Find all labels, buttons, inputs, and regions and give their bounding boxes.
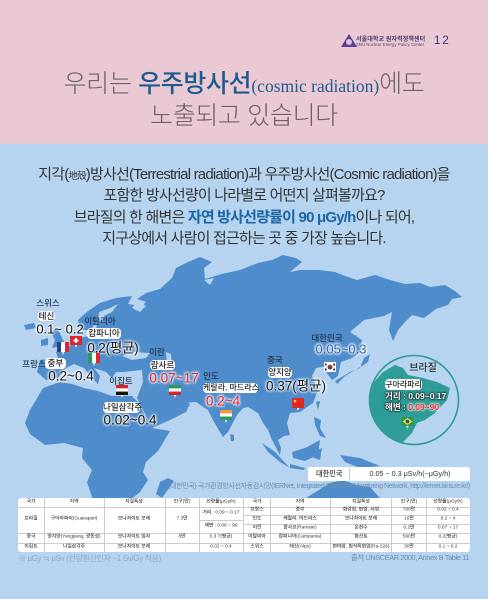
Italy label group: 0.2(평균) bbox=[87, 340, 139, 355]
title: 노출되고 있습니다 bbox=[150, 102, 338, 130]
Egypt label group bbox=[101, 376, 158, 428]
data table: 스위스 bbox=[250, 545, 264, 550]
data table: 모나자이트 모래 bbox=[118, 517, 150, 522]
data table: 지역 bbox=[70, 500, 78, 505]
data table: 0.1 ~ 0.2 bbox=[439, 545, 457, 550]
Italy label group bbox=[84, 316, 140, 358]
Iran label group: 이란 bbox=[149, 347, 165, 357]
text block: introduction: 지각(地殼)방사선(Terrestrial radiation)과 우주방사선(Cosmic radiation)을 bbox=[38, 166, 450, 183]
data table: 프랑스 bbox=[250, 508, 264, 513]
text block: introduction: 지구상에서 사람이 접근하는 곳 중 가장 높습니다. bbox=[102, 230, 386, 247]
France label group: 프랑스 bbox=[22, 359, 46, 369]
data table: 0.07 ~ 17 bbox=[438, 526, 458, 531]
data table: 30만 bbox=[404, 545, 414, 550]
Switzerland label group: 스위스 bbox=[36, 298, 60, 308]
data table: 7.3만 bbox=[176, 517, 188, 522]
France label group bbox=[22, 358, 96, 384]
text block: introduction: 브라질의 한 해변은 자연 방사선량률이 90 μGy/h이나 되어, bbox=[74, 209, 414, 226]
data table: 구아라파리(Guarapari) bbox=[51, 517, 97, 522]
data table: 모나자이트 모래 bbox=[345, 517, 377, 522]
flag: China bbox=[292, 398, 304, 411]
data table: 모나자이트 모래 bbox=[118, 545, 150, 550]
data table: 나일삼각주 bbox=[63, 545, 85, 550]
data table: 700만 bbox=[403, 508, 415, 513]
center name bbox=[356, 36, 425, 47]
France label group: 0.2~0.4 bbox=[48, 368, 94, 383]
data table: 0.02 ~ 0.4 bbox=[437, 508, 459, 513]
data table: 이탈리아 bbox=[248, 535, 266, 540]
center name: SNU Nuclear Energy Policy Center bbox=[356, 42, 424, 47]
panel: pink header bbox=[0, 0, 488, 144]
flag: France bbox=[57, 342, 69, 355]
China label group bbox=[264, 355, 328, 396]
China label group: 0.37(평균) bbox=[266, 378, 326, 393]
data table: 지역 bbox=[296, 500, 304, 505]
Egypt label group: 0.02~0.4 bbox=[104, 412, 156, 427]
data table: 거리 : 0.09 ~ 0.17 bbox=[203, 511, 239, 516]
flag: India bbox=[220, 410, 232, 423]
data table: 0.2(평균) bbox=[439, 535, 457, 540]
Italy label group: 이탈리아 bbox=[84, 316, 116, 326]
legend: Korea range: 대한민국 bbox=[316, 469, 342, 478]
data table: 0.2만 bbox=[403, 526, 415, 531]
Korea label group bbox=[311, 333, 368, 356]
India label group: 인도 bbox=[203, 371, 219, 381]
data table: 캄파니아(Campania) bbox=[279, 535, 321, 540]
data table: 인구(만) bbox=[174, 500, 190, 505]
flag: Egypt bbox=[116, 385, 128, 398]
data table: 국가 bbox=[253, 500, 261, 505]
world map bbox=[24, 255, 462, 498]
data table: 지질특성 bbox=[352, 500, 370, 505]
data table: 이란 bbox=[253, 526, 261, 531]
data table: 국가 bbox=[27, 500, 35, 505]
data table: 10만 bbox=[404, 517, 414, 522]
icon: center logo bbox=[341, 34, 357, 47]
Brazil labels: 브라질 bbox=[409, 363, 437, 374]
data table: 람사르(Ramsar) bbox=[283, 526, 317, 531]
China label group: 중국 bbox=[267, 355, 283, 365]
Brazil labels: 거리 : 0.09~0.17 bbox=[385, 391, 446, 401]
flag: Iran bbox=[169, 385, 181, 398]
panel: Brazil inset bbox=[368, 354, 460, 446]
data table: 이집트 bbox=[24, 545, 38, 550]
flag: Italy bbox=[88, 353, 100, 366]
data table: 선량률(μGy/h) bbox=[206, 500, 236, 505]
data table: 8만 bbox=[178, 535, 186, 540]
Italy label group: 캄파니아 bbox=[88, 328, 120, 338]
data table: 인구(만) bbox=[401, 500, 417, 505]
page number: 12 bbox=[434, 35, 451, 47]
Iran label group bbox=[147, 347, 200, 386]
Brazil labels: 해변 : 0.09~90 bbox=[385, 402, 439, 412]
data table: 케랄라, 마드라스 bbox=[283, 517, 317, 522]
data table: 0.02 ~ 0.4 bbox=[210, 545, 232, 550]
data table: 양지양(Yangjiang, 광동성) bbox=[47, 535, 101, 540]
data table bbox=[18, 498, 470, 552]
legend: Korea range bbox=[308, 467, 470, 481]
flag: Brazil bbox=[402, 417, 414, 429]
data table: 중국 bbox=[27, 535, 35, 540]
India label group: 0.2~4 bbox=[206, 393, 240, 408]
data table: 선량률(μGy/h) bbox=[433, 500, 463, 505]
data table: 화산토 bbox=[354, 535, 368, 540]
footnote: unit conversion: ※ μGy ≒ μSv (선량환산인자 ~1 Sv/Gy 적용) bbox=[18, 554, 161, 563]
data table: 0.2 ~ 4 bbox=[441, 517, 455, 522]
data table: 지질특성 bbox=[125, 500, 143, 505]
France label group: 중부 bbox=[48, 358, 63, 368]
India label group: 케랄라, 마드라스 bbox=[203, 383, 259, 392]
data table: 온천수 bbox=[354, 526, 368, 531]
text block: introduction bbox=[38, 166, 450, 247]
title bbox=[64, 70, 424, 130]
data table: 0.3 7(평균) bbox=[210, 535, 232, 540]
center name: 서울대학교 원자력정책센터 bbox=[356, 37, 425, 43]
Switzerland label group: 0.1~ 0.2 bbox=[36, 322, 84, 336]
Brazil labels bbox=[384, 362, 448, 413]
Iran label group: 람사르 bbox=[151, 360, 174, 370]
flag: Switzerland bbox=[70, 336, 82, 348]
text block: introduction: 포함한 방사선량이 나라별로 어떤지 살펴볼까요? bbox=[103, 187, 384, 204]
title: 우리는 우주방사선(cosmic radiation)에도 bbox=[64, 70, 424, 98]
data table: 테신(Alps) bbox=[289, 545, 311, 550]
data table: 중부 bbox=[296, 508, 304, 513]
Korea label group: 대한민국 bbox=[311, 333, 343, 343]
data table: 해변 : 0.09 ~ 90 bbox=[205, 524, 237, 529]
source: IERNet: (대한민국) 국가환경방사선자동감시망(IERNet, Integrated Radiation Monitoring Network, http://iernet.kins.re.kr/) bbox=[168, 482, 470, 490]
China label group: 양지양 bbox=[268, 367, 292, 377]
data table: 화강암, 편암, 사암 bbox=[343, 508, 379, 513]
data table: 브라질 bbox=[24, 517, 38, 522]
data table: 모나자이트 입자 bbox=[118, 535, 150, 540]
Egypt label group: 나일삼각주 bbox=[103, 402, 142, 412]
data table: 편마암, 침식퇴화암(Ra-226) bbox=[333, 545, 389, 550]
Korea label group: 0.05~0.3 bbox=[316, 342, 366, 356]
data table: 인도 bbox=[253, 517, 261, 522]
Iran label group: 0.07~17 bbox=[149, 370, 199, 385]
data table: 560만 bbox=[403, 535, 415, 540]
Brazil labels: 구아라파리 bbox=[385, 380, 422, 389]
Egypt label group: 이집트 bbox=[109, 376, 133, 386]
source: UNSCEAR: 출처 UNSCEAR 2000, Annex B Table 11 bbox=[351, 553, 469, 562]
India label group bbox=[203, 371, 259, 408]
legend: Korea range: 0.05 ~ 0.3 μSv/h(~μGy/h) bbox=[370, 469, 450, 478]
Switzerland label group bbox=[34, 298, 86, 336]
Switzerland label group: 테신 bbox=[39, 311, 54, 321]
flag: South Korea bbox=[324, 362, 336, 372]
